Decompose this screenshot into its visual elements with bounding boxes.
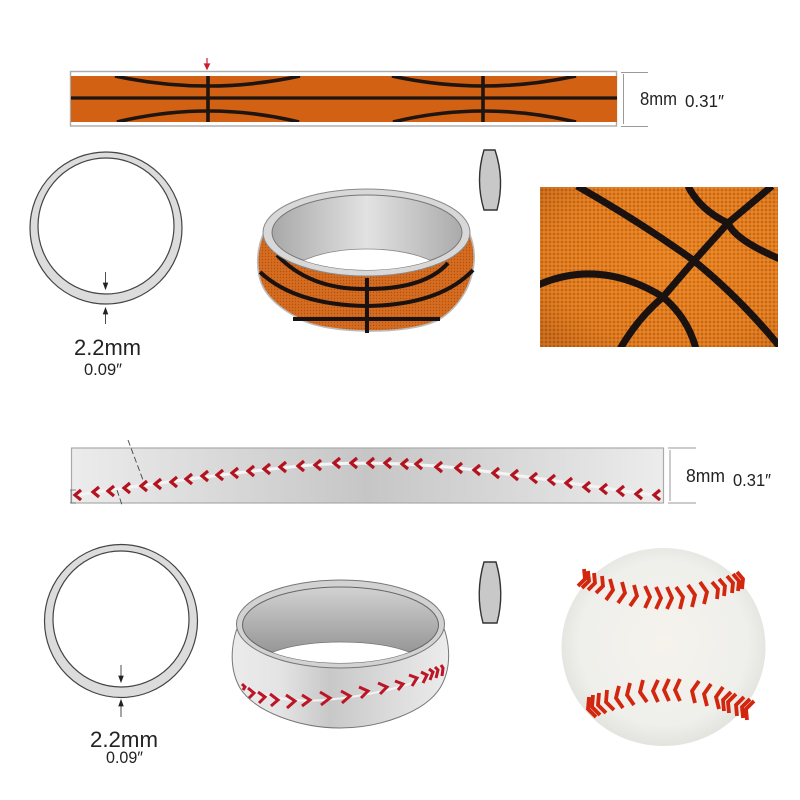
width dimension: baseball strip: 0.31″	[733, 470, 771, 490]
thickness label: basketball ring: 2.2mm	[74, 335, 141, 360]
cross section: basketball ring	[480, 150, 501, 210]
thickness arrows: baseball ring	[119, 665, 123, 717]
width dimension: basketball strip: 0.31″	[685, 91, 724, 111]
thickness label: baseball ring: 2.2mm	[90, 727, 158, 752]
baseball ring 3D view	[232, 580, 449, 728]
baseball photo	[562, 548, 766, 746]
basketball close-up photo	[538, 186, 780, 349]
basketball ring flat strip	[70, 72, 617, 126]
basketball ring 3D view	[258, 189, 474, 333]
thickness label: baseball ring: 0.09″	[106, 748, 143, 767]
top seam stitches	[578, 569, 743, 609]
thickness label: basketball ring: 0.09″	[84, 360, 122, 379]
thickness label: basketball ring	[74, 335, 141, 379]
thickness arrows: basketball ring	[103, 272, 108, 324]
bottom seam stitches	[588, 679, 754, 720]
width dimension: basketball strip	[621, 72, 724, 126]
width dimension: baseball strip: 8mm	[686, 466, 725, 486]
thickness label: baseball ring	[90, 727, 158, 767]
icon: red seam marker arrow	[205, 58, 209, 69]
cross section: baseball ring	[479, 562, 501, 623]
baseball ring flat strip	[70, 440, 664, 505]
baseball ring top view	[44, 544, 198, 698]
basketball ring top view	[30, 152, 182, 304]
width dimension: basketball strip: 8mm	[640, 89, 677, 109]
width dimension: baseball strip	[668, 448, 771, 503]
